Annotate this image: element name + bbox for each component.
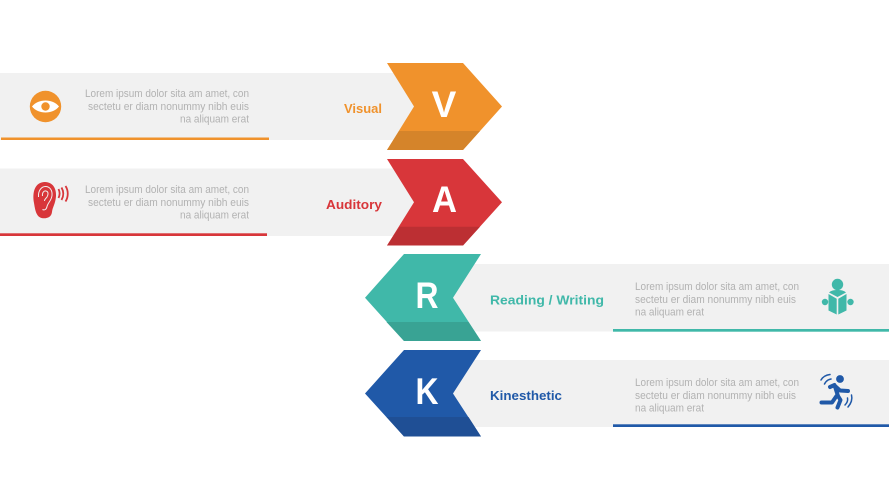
text block: Visual description [85,88,250,126]
chevron: V: V [432,84,457,125]
chevron: K [365,350,481,436]
chevron: R: R [416,275,438,316]
chevron: A: A [432,179,457,220]
label: Auditory: Auditory [326,198,382,212]
text block: Reading / Writing description: sectetu er diam nonummy nibh euis [635,294,796,306]
grey band: Kinesthetic [447,360,889,427]
text block: Visual description: sectetu er diam nonummy nibh euis [88,101,249,113]
text block: Kinesthetic description [635,377,799,414]
chevron: K: K [416,371,439,412]
accent line: Kinesthetic [613,424,889,427]
label: Reading / Writing: Reading / Writing [490,294,604,308]
icon: ear [33,182,68,218]
icon: runner [821,374,852,408]
text block: Visual description: Lorem ipsum dolor sita am amet, con [85,88,249,100]
accent line: Auditory [0,233,267,236]
chevron: V [387,63,502,150]
accent line: Reading / Writing [613,329,889,332]
panel: Visual [0,63,502,150]
text block: Reading / Writing description: na aliquam erat [635,306,705,318]
chevron: R [365,254,481,341]
text block: Auditory description [85,184,250,222]
text block: Auditory description: Lorem ipsum dolor sita am amet, con [85,184,249,196]
text block: Auditory description: sectetu er diam nonummy nibh euis [88,197,249,209]
panel: Kinesthetic [365,350,889,436]
icon: reader [822,279,854,314]
text block: Reading / Writing description: Lorem ipsum dolor sita am amet, con [635,281,799,293]
label: Visual: Visual [344,102,382,116]
grey band: Visual [0,73,420,140]
text block: Reading / Writing description [635,281,799,318]
text block: Auditory description: na aliquam erat [180,210,250,222]
chevron: A [387,159,502,246]
panel: Reading / Writing [365,254,889,341]
text block: Kinesthetic description: Lorem ipsum dolor sita am amet, con [635,377,799,389]
text block: Kinesthetic description: sectetu er diam nonummy nibh euis [635,390,796,402]
text block: Kinesthetic description: na aliquam erat [635,402,705,414]
label: Kinesthetic: Kinesthetic [490,389,562,403]
text block: Visual description: na aliquam erat [180,114,250,126]
grey band: Auditory [0,168,420,236]
accent line: Visual [1,138,269,140]
icon: eye [30,91,61,122]
grey band: Reading / Writing [447,264,889,332]
panel: Auditory [0,159,502,246]
